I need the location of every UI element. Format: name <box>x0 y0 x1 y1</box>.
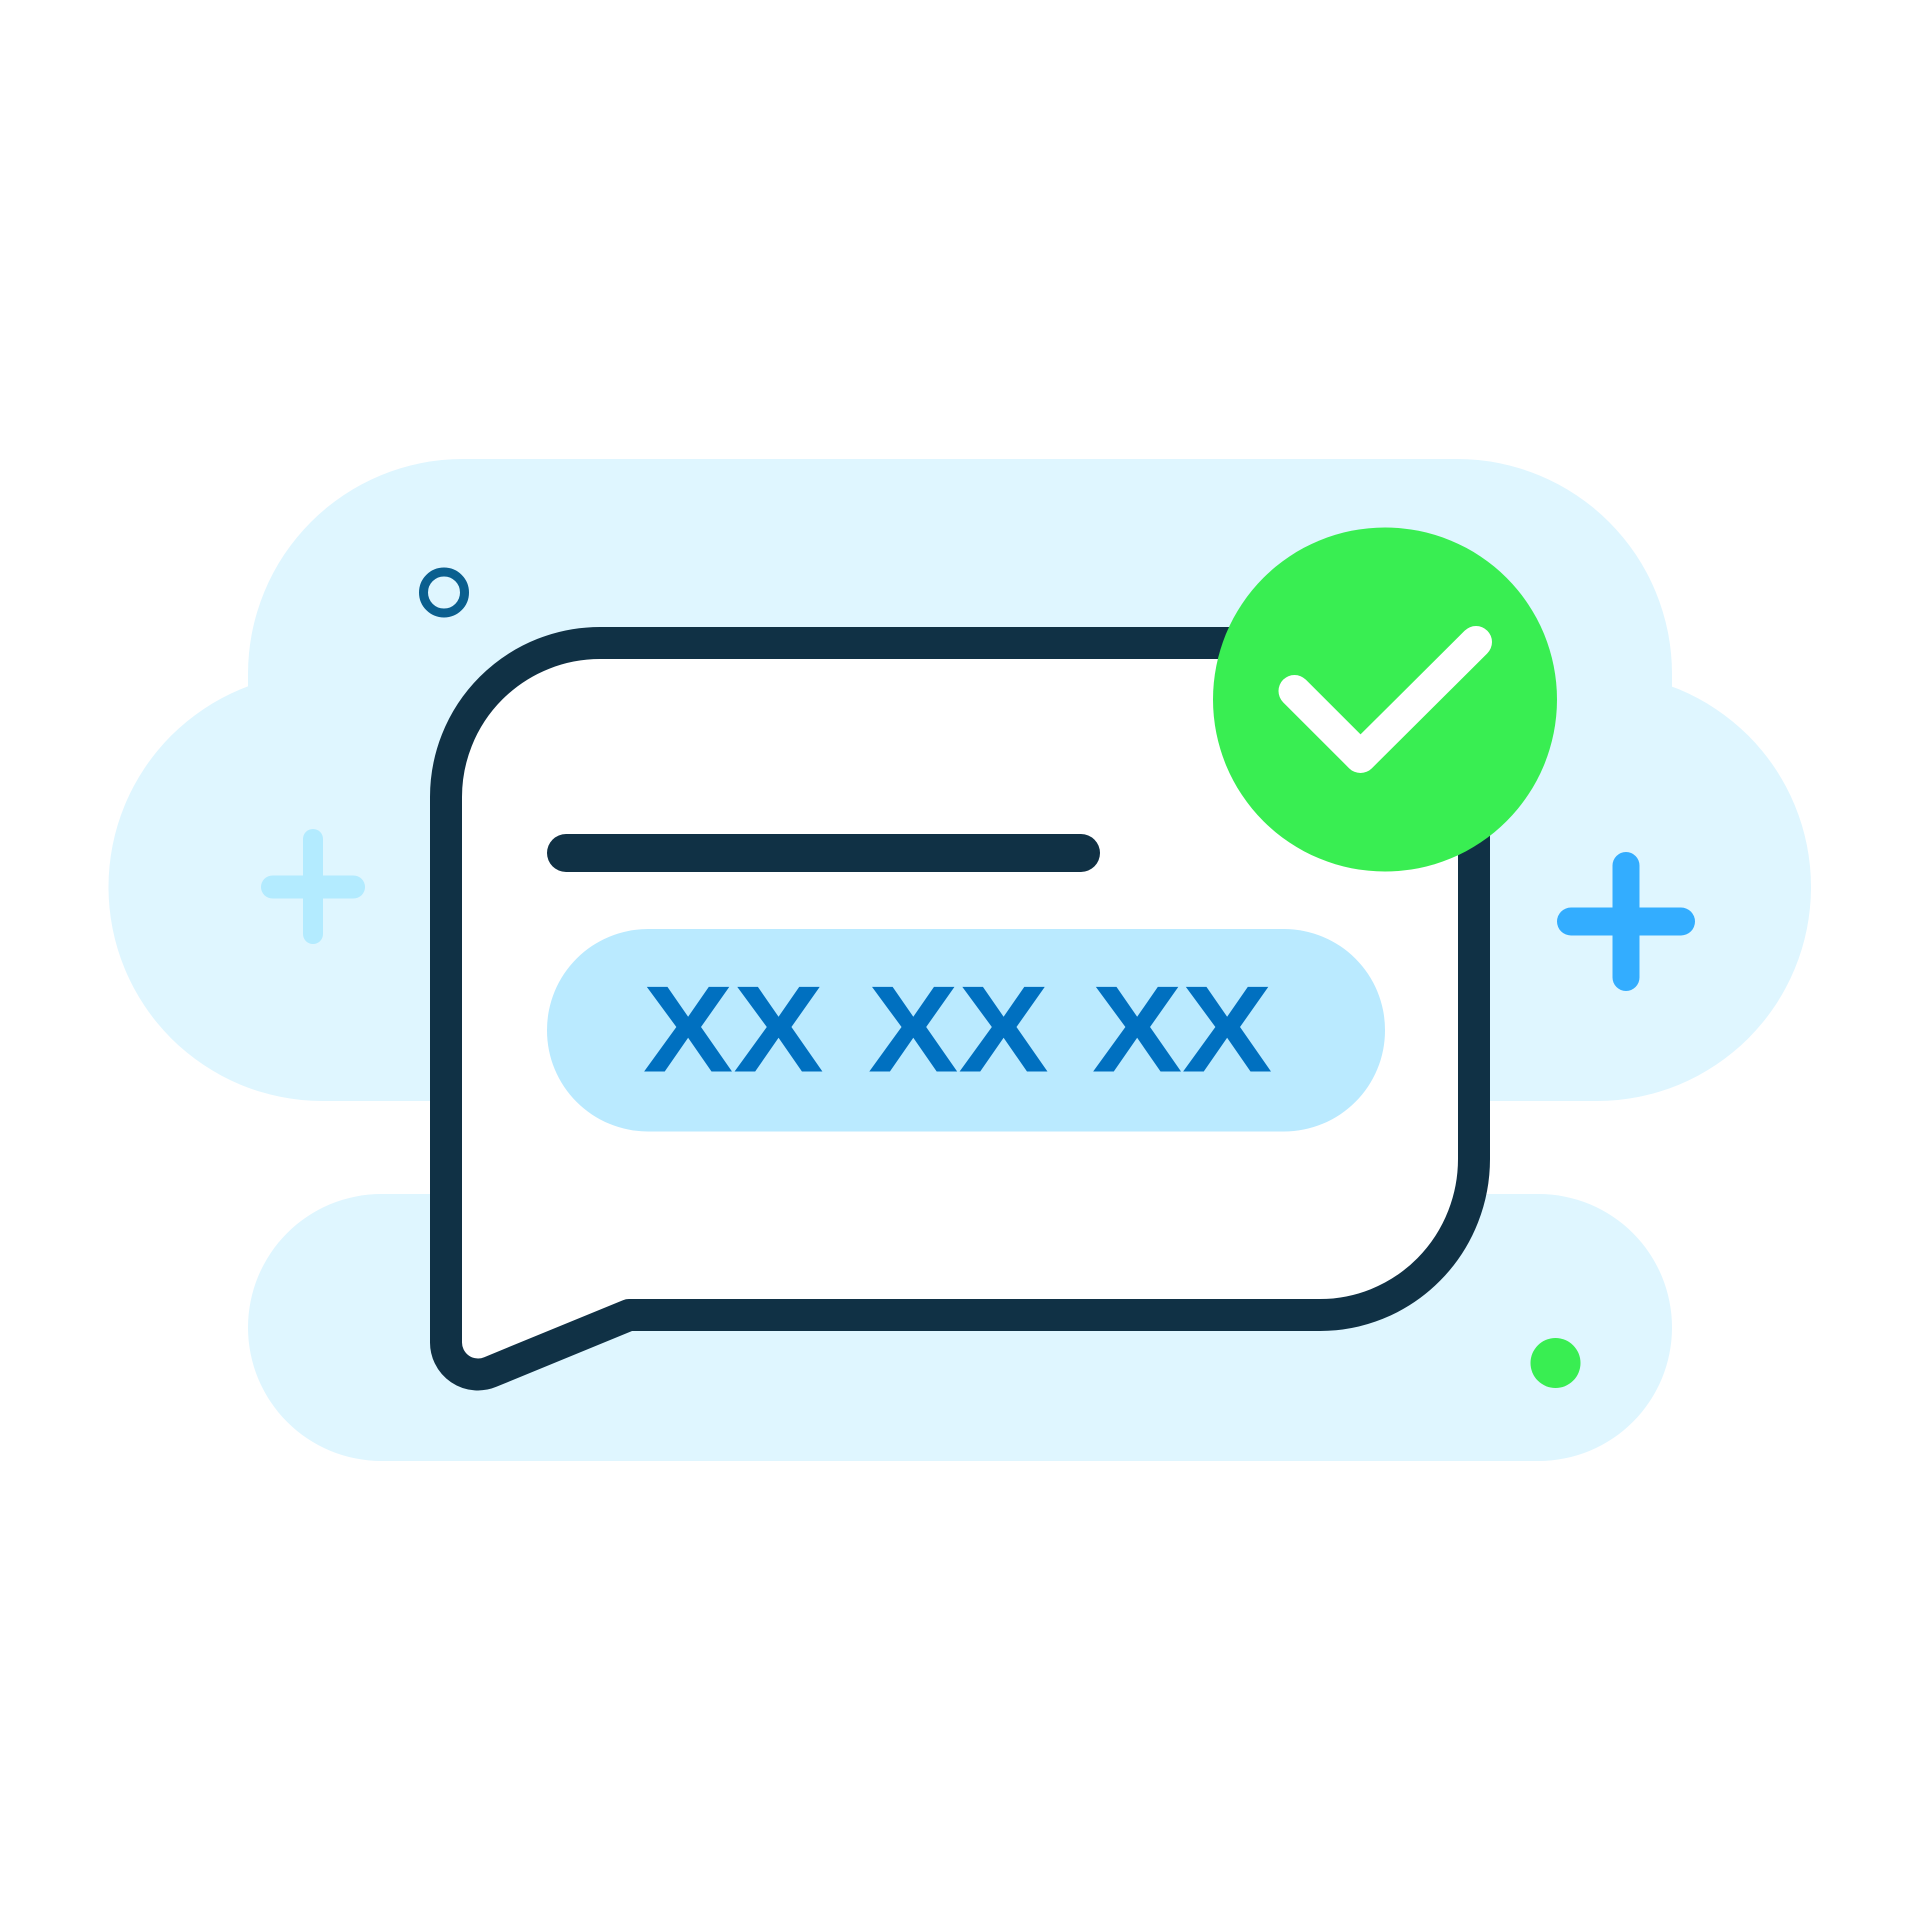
plus icon: light blue <box>261 829 365 944</box>
code pill <box>547 929 1385 1132</box>
icon: green check badge <box>1213 528 1557 872</box>
speech bubble <box>446 643 1474 1374</box>
check mark <box>1294 642 1476 757</box>
plus icon: bright blue <box>1557 852 1695 991</box>
background cloud: lower <box>248 1194 1672 1461</box>
ring decoration <box>424 572 464 613</box>
green dot <box>1530 1338 1580 1388</box>
background cloud: upper <box>108 459 1811 1101</box>
code text: XX XX XX <box>643 961 1272 1098</box>
message line <box>547 834 1100 872</box>
